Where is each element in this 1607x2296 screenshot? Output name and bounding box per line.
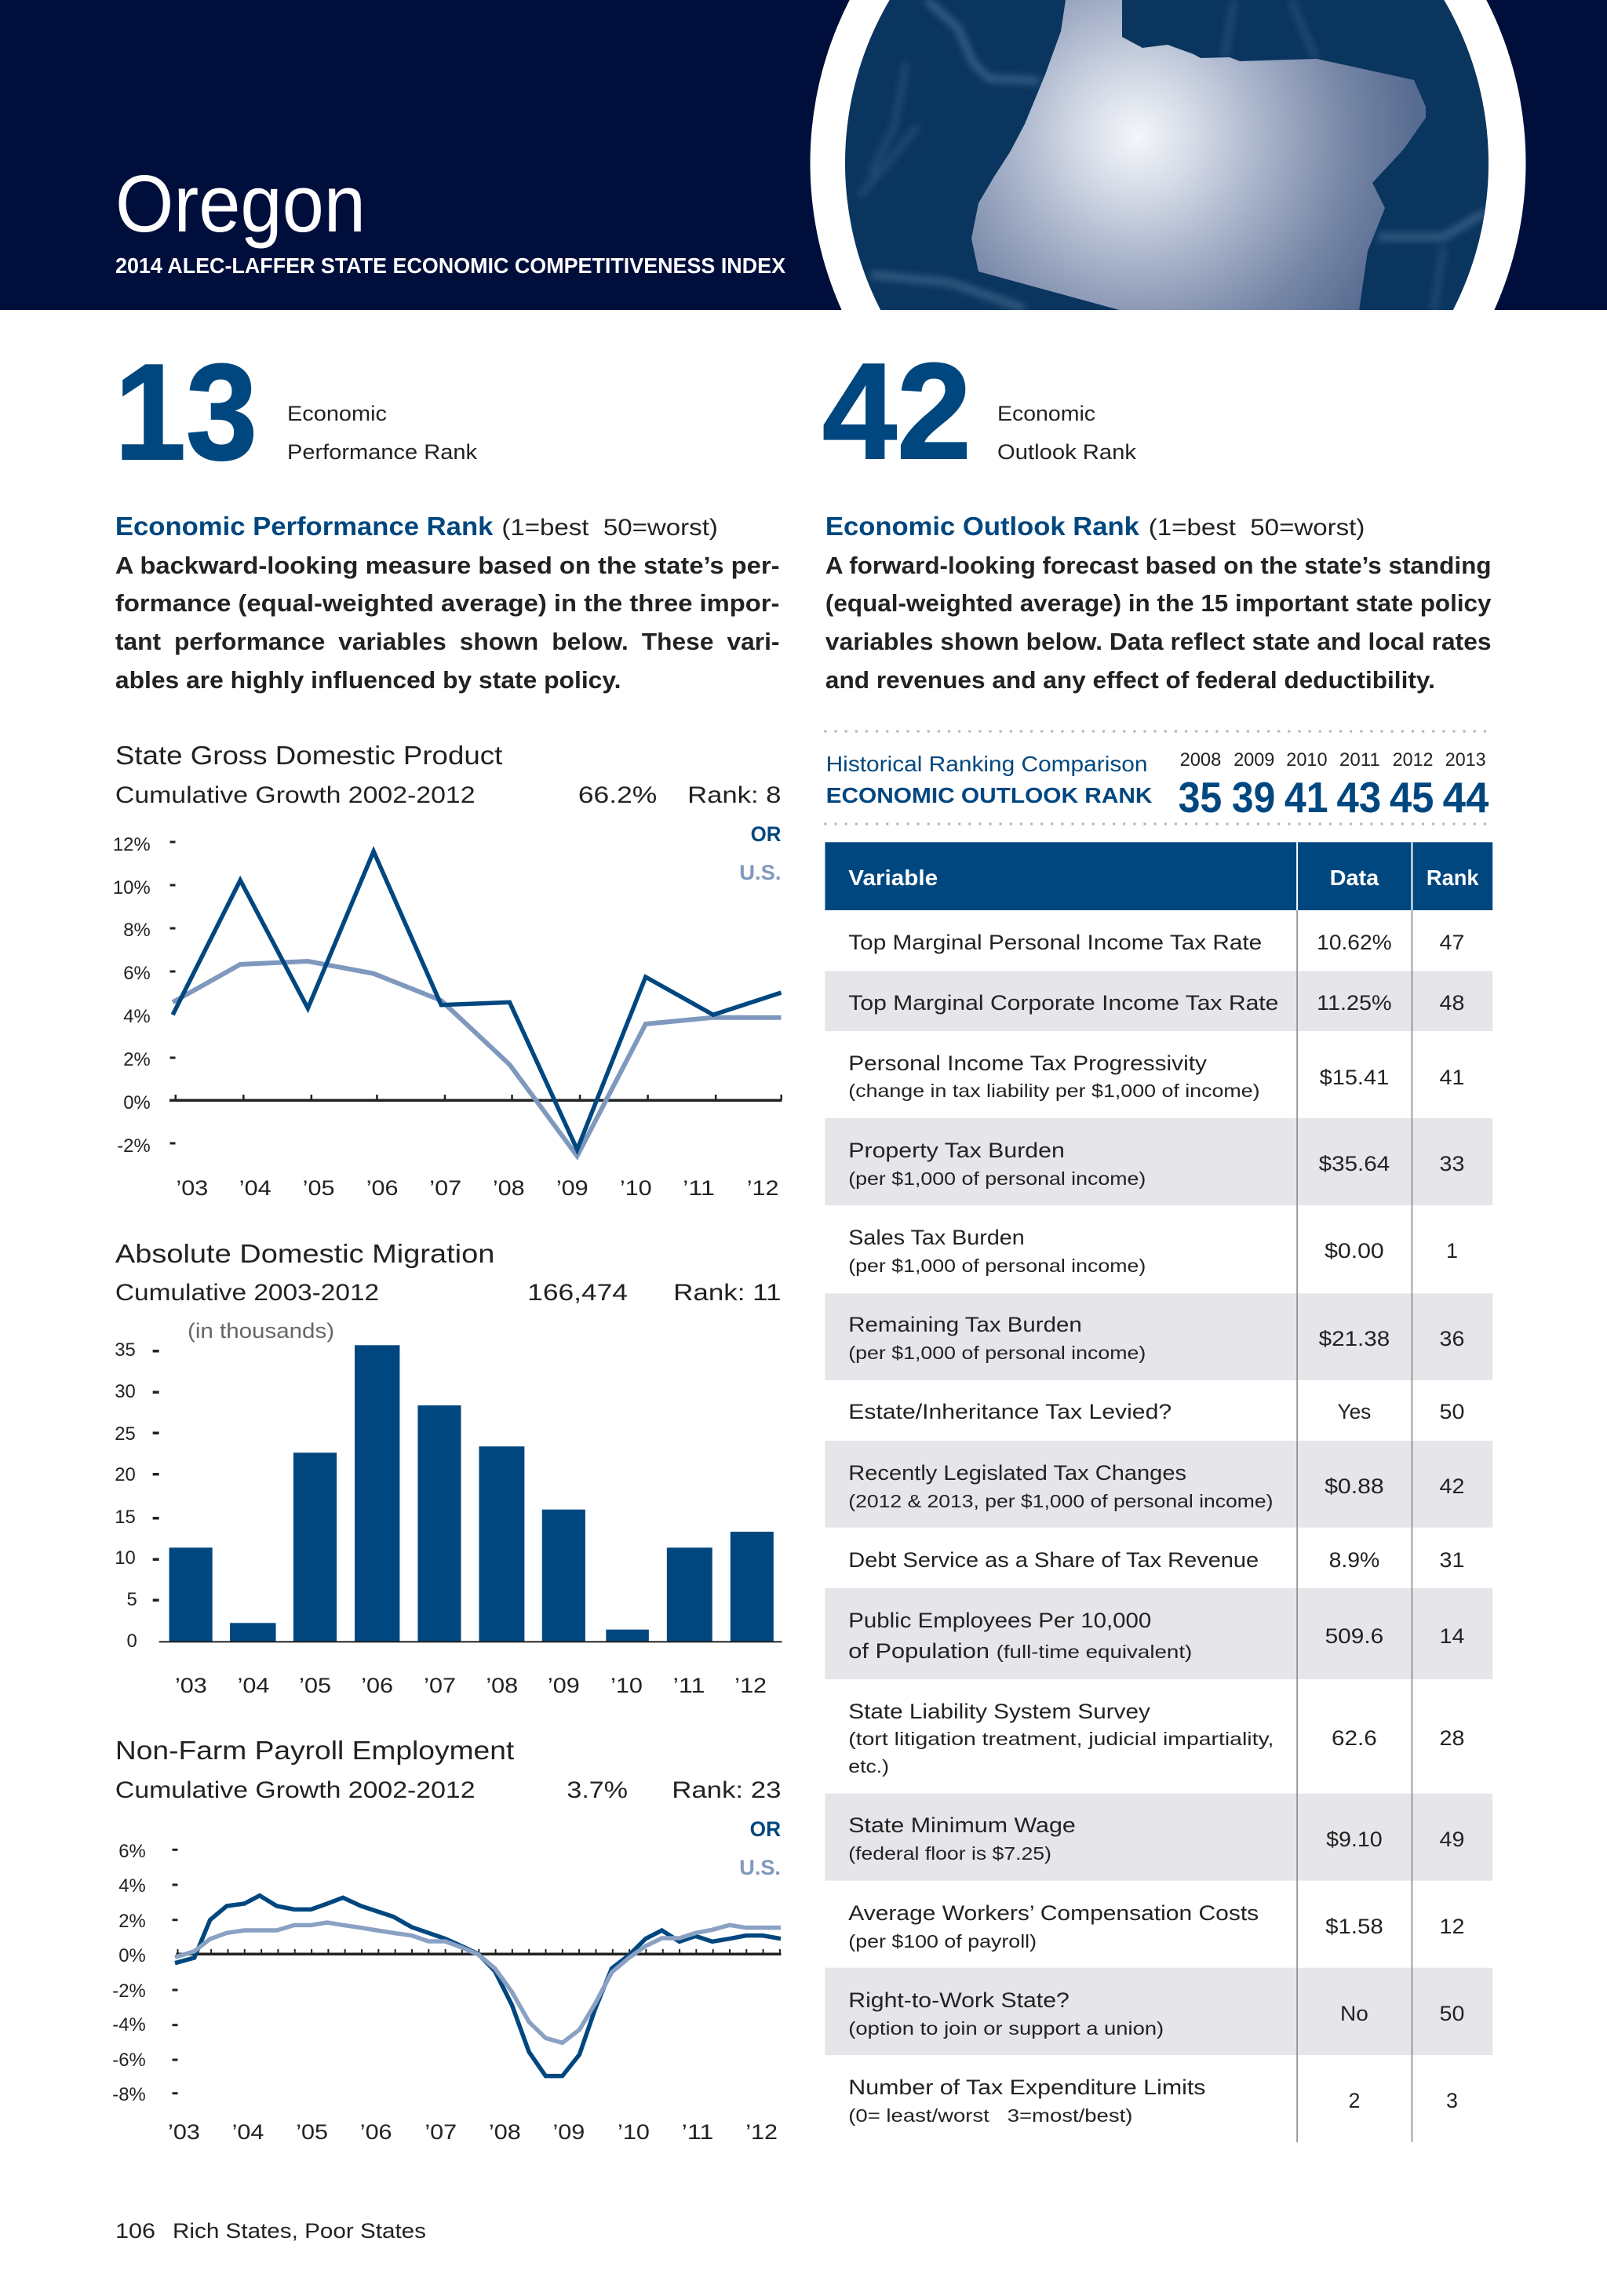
years and ranks: 2013 [1445,749,1486,771]
row: estate/inheritance tax [848,1400,1464,1423]
text block: economic outlook description: A forward-looking forecast based on the state’s standing [825,552,1492,579]
chart heading: Absolute Domestic Migration [115,1239,494,1268]
legend: OR [751,822,781,846]
bar chart: migration: 0 [126,1631,137,1652]
row: remaining tax burden: Remaining Tax Burden [848,1313,1082,1336]
row: property tax burden: 33 [1440,1152,1464,1175]
text block: economic outlook description: (equal-weighted average) in the 15 important state policy [825,589,1492,617]
row: debt service [848,1548,1464,1572]
footer: page number and title: Rich States, Poor States [173,2219,426,2243]
line chart: employment: -6% [112,2050,146,2071]
row: top marginal personal income tax rate: 47 [1440,931,1464,954]
chart heading [115,1736,781,1803]
bar chart: migration: ’09 [548,1674,580,1697]
line chart: employment: ’07 [425,2120,457,2144]
line chart: GDP growth: -2% [117,1135,151,1157]
row: top marginal corporate income tax rate: 11.25% [1317,991,1392,1015]
legend [739,1817,781,1879]
chart heading: Cumulative Growth 2002-2012 [115,782,476,808]
line chart: GDP growth: 6% [123,963,151,984]
row: sales tax burden: Sales Tax Burden [848,1226,1025,1249]
row: personal income tax progressivity: 41 [1440,1066,1464,1089]
legend [739,822,781,884]
line chart: GDP growth: ’05 [303,1176,334,1200]
line chart: employment: 6% [118,1841,146,1862]
row: top marginal corporate income tax rate: Top Marginal Corporate Income Tax Rate [848,991,1278,1015]
row: top marginal personal income tax rate: Top Marginal Personal Income Tax Rate [848,931,1262,954]
row: personal income tax progressivity: $15.41 [1320,1066,1389,1089]
row: debt service: Debt Service as a Share of Tax Revenue [848,1548,1259,1572]
years and ranks: 41 [1285,773,1328,822]
bar chart: migration: ’05 [299,1674,331,1697]
row: workers' compensation [848,1901,1464,1952]
years and ranks: 2008 [1180,749,1221,771]
chart heading: Non-Farm Payroll Employment [115,1736,514,1765]
chart heading: 66.2% [578,782,657,808]
line chart: employment [112,1817,781,2144]
rank caption: Outlook Rank [997,440,1137,464]
rank caption [287,402,478,464]
row: tax expenditure limits: 2 [1348,2089,1360,2112]
text block: economic performance description: tant performance variables shown below. These vari- [115,628,779,655]
line chart: GDP growth [113,822,782,1200]
panel: historical ranking comparison: ECONOMIC OUTLOOK RANK [826,783,1152,807]
row: state liability system survey: State Liability System Survey [848,1700,1150,1723]
bar chart: migration: 35 [115,1339,136,1361]
bar chart: migration: ’12 [734,1674,767,1697]
row: recently legislated tax changes: Recently Legislated Tax Changes [848,1461,1186,1485]
row: sales tax burden: $0.00 [1325,1239,1384,1263]
years and ranks: 2009 [1233,749,1274,771]
line chart: GDP growth: ’08 [493,1176,525,1200]
legend: U.S. [739,861,781,884]
subtitle: 2014 ALEC-LAFFER STATE ECONOMIC COMPETITIVENESS INDEX [115,253,785,278]
row: state liability system survey: 28 [1440,1726,1464,1750]
line chart: GDP growth: ’06 [366,1176,399,1200]
rank caption: Economic [287,402,387,425]
line chart: employment: ’05 [296,2120,328,2144]
line chart: GDP growth: 2% [123,1049,151,1070]
chart heading: Cumulative Growth 2002-2012 [115,1777,476,1803]
bar chart: migration: 15 [115,1507,136,1528]
row: recently legislated tax changes [848,1461,1464,1511]
bar chart: migration: 5 [126,1589,137,1610]
row: remaining tax burden: $21.38 [1319,1327,1390,1350]
row: right-to-work: 50 [1440,2002,1464,2025]
line chart: GDP growth: ’11 [683,1176,715,1200]
big rank: economic performance: 13 [115,335,257,488]
row: state liability system survey [848,1700,1464,1777]
row: public employees: (full-time equivalent) [997,1642,1192,1662]
line chart: GDP growth: ’09 [556,1176,589,1200]
row: remaining tax burden: 36 [1440,1327,1464,1350]
row: recently legislated tax changes: 42 [1440,1474,1464,1498]
row: top marginal corporate income tax rate: 48 [1440,991,1464,1015]
bar chart: migration [115,1319,782,1697]
row: right-to-work: Right-to-Work State? [848,1988,1070,2012]
row: state minimum wage: $9.10 [1326,1828,1383,1851]
row: public employees: of Population [848,1639,989,1663]
legend: U.S. [739,1856,781,1879]
text block: economic outlook description: Economic Outlook Rank [825,512,1140,541]
rank caption: Economic [997,402,1095,425]
panel: historical ranking comparison: Historical Ranking Comparison [826,752,1147,776]
row: public employees: 509.6 [1325,1624,1383,1648]
line chart: employment: ’11 [682,2120,713,2144]
row: top marginal personal income tax rate: 10.62% [1317,931,1392,954]
table: policy variables [825,842,1492,2142]
row: workers' compensation: Average Workers’ Compensation Costs [848,1901,1259,1925]
text block: economic performance description: Economic Performance Rank [115,512,494,541]
footer: page number and title: 106 [115,2219,155,2243]
line chart: employment: ’06 [360,2120,392,2144]
big rank: economic performance [115,335,478,488]
row: sales tax burden: 1 [1446,1239,1458,1263]
bar chart: migration: ’03 [175,1674,207,1697]
big rank: economic outlook [822,334,1137,487]
bar chart: migration: ’10 [610,1674,643,1697]
bar chart: migration: 20 [115,1464,136,1485]
legend: OR [750,1817,781,1841]
line chart: GDP growth: ’10 [620,1176,652,1200]
years and ranks: 35 [1179,773,1222,822]
line chart: employment: 4% [118,1875,146,1897]
table header: Rank [1427,866,1479,890]
row: debt service: 8.9% [1329,1548,1379,1572]
row: remaining tax burden [848,1313,1464,1363]
row: top marginal corporate income tax rate [848,991,1464,1015]
row: tax expenditure limits: Number of Tax Expenditure Limits [848,2076,1206,2099]
years and ranks: 39 [1232,773,1275,822]
row: tax expenditure limits [848,2076,1458,2126]
text block: economic performance description: A backward-looking measure based on the state’s per- [115,552,779,579]
row: tax expenditure limits: 3 [1446,2089,1458,2112]
Oregon series [175,1896,781,2076]
text block: economic outlook description: and revenues and any effect of federal deductibility. [825,666,1435,694]
row: personal income tax progressivity [848,1051,1464,1101]
text block: economic performance description [115,512,779,694]
years and ranks: 45 [1390,773,1434,822]
bar chart: migration: 10 [115,1547,136,1569]
row: public employees: 14 [1440,1624,1464,1648]
map medallion: Oregon state in circle [810,0,1525,310]
line chart: employment: -4% [112,2014,146,2035]
years and ranks: 2010 [1286,749,1328,771]
row: public employees [848,1609,1464,1663]
row: state minimum wage: State Minimum Wage [848,1813,1076,1837]
line chart: employment: ’08 [489,2120,521,2144]
row: sales tax burden [848,1226,1458,1276]
row: personal income tax progressivity: Personal Income Tax Progressivity [848,1051,1207,1075]
line chart: employment: ’10 [618,2120,650,2144]
chart heading: Rank: 23 [672,1777,781,1803]
row: state minimum wage: (federal floor is $7.25) [848,1843,1051,1864]
chart heading [115,741,781,808]
years and ranks: 44 [1443,773,1489,822]
line chart: GDP growth: 0% [123,1092,151,1113]
chart heading: State Gross Domestic Product [115,741,502,770]
chart heading: Rank: 11 [673,1280,781,1306]
chart heading: Cumulative 2003-2012 [115,1280,379,1306]
years and ranks [1179,749,1489,822]
years and ranks: 2011 [1339,749,1380,771]
row: property tax burden: (per $1,000 of personal income) [848,1168,1146,1189]
line chart: employment: -8% [112,2084,146,2105]
line chart: employment: ’03 [168,2120,200,2144]
line chart: GDP growth: 10% [113,877,151,898]
row: remaining tax burden: (per $1,000 of personal income) [848,1343,1146,1363]
row: recently legislated tax changes: $0.88 [1325,1474,1384,1498]
row: workers' compensation: 12 [1440,1915,1464,1938]
chart heading: Rank: 8 [687,782,781,808]
row: sales tax burden: (per $1,000 of personal income) [848,1256,1146,1276]
panel: historical ranking comparison [825,731,1492,824]
line chart: GDP growth: ’04 [239,1176,271,1200]
row: state liability system survey: 62.6 [1332,1726,1377,1750]
chart heading [115,1239,781,1306]
row: state liability system survey: (tort litigation treatment, judicial impartiality, [848,1729,1274,1749]
row: state minimum wage: 49 [1440,1828,1464,1851]
line chart: employment: ’09 [552,2120,585,2144]
line chart: employment: -2% [112,1981,146,2002]
line chart: employment: ’12 [745,2120,778,2144]
row: estate/inheritance tax: Yes [1338,1400,1371,1423]
bar chart: migration: (in thousands) [188,1319,334,1343]
text block: economic performance description: ables are highly influenced by state policy. [115,666,621,694]
line chart: GDP growth: 12% [113,834,151,855]
panel: non-farm payroll employment [112,1736,781,2144]
row: tax expenditure limits: (0= least/worst 3=most/best) [848,2105,1132,2126]
text block: economic performance description: (1=best 50=worst) [501,515,718,541]
text block: economic outlook description: (1=best 50=worst) [1149,515,1365,541]
row: personal income tax progressivity: (change in tax liability per $1,000 of income) [848,1081,1260,1101]
line chart: GDP growth: ’03 [176,1176,208,1200]
row: right-to-work: No [1340,2002,1368,2025]
bar chart: migration: ’06 [361,1674,393,1697]
bar chart: migration: 25 [115,1423,136,1445]
title: Oregon [115,159,366,249]
table header: Data [1330,866,1379,890]
row: state minimum wage [848,1813,1464,1864]
bar chart: migration: ’11 [673,1674,705,1697]
U.S. series [175,1922,781,2043]
Oregon series [173,851,781,1150]
text block: economic performance description: formance (equal-weighted average) in the three impor- [115,589,779,617]
U.S. series [173,961,781,1156]
rank caption [997,402,1137,464]
row: debt service: 31 [1440,1548,1464,1572]
big rank: economic outlook: 42 [822,334,971,487]
row: recently legislated tax changes: (2012 & 2013, per $1,000 of personal income) [848,1491,1273,1511]
row: workers' compensation: $1.58 [1325,1915,1383,1938]
row: property tax burden [848,1139,1464,1189]
row: estate/inheritance tax: Estate/Inheritance Tax Levied? [848,1400,1172,1423]
chart heading: 3.7% [567,1777,628,1803]
panel: state gross domestic product [113,741,782,1200]
panel: absolute domestic migration [115,1239,782,1697]
text block: economic outlook description: variables shown below. Data reflect state and local rates [825,628,1492,655]
bar chart: migration: 30 [115,1381,136,1402]
years and ranks: 43 [1337,773,1381,822]
line chart: employment: ’04 [232,2120,264,2144]
row: state liability system survey: etc.) [848,1756,889,1777]
row: property tax burden: $35.64 [1319,1152,1390,1175]
header banner [0,0,1607,461]
row: right-to-work [848,1988,1464,2039]
row: public employees: Public Employees Per 10,000 [848,1609,1151,1632]
table header: Variable [848,866,938,890]
rank caption: Performance Rank [287,440,478,464]
line chart: employment: 0% [118,1945,146,1966]
table header [825,842,1492,910]
row: property tax burden: Property Tax Burden [848,1139,1065,1162]
chart heading: 166,474 [527,1280,628,1306]
bar chart: migration: ’08 [486,1674,518,1697]
line chart: GDP growth: 4% [123,1006,151,1027]
line chart: GDP growth: 8% [123,920,151,941]
row: estate/inheritance tax: 50 [1440,1400,1464,1423]
line chart: GDP growth: ’07 [429,1176,461,1200]
row: right-to-work: (option to join or support a union) [848,2018,1164,2039]
years and ranks: 2012 [1393,749,1433,771]
bar chart: migration: ’04 [238,1674,269,1697]
line chart: GDP growth: ’12 [747,1176,778,1200]
line chart: employment: 2% [118,1911,146,1932]
row: workers' compensation: (per $100 of payroll) [848,1931,1037,1952]
bar chart: migration: ’07 [424,1674,456,1697]
text block: economic outlook description [825,512,1492,694]
row: top marginal personal income tax rate [848,931,1464,954]
